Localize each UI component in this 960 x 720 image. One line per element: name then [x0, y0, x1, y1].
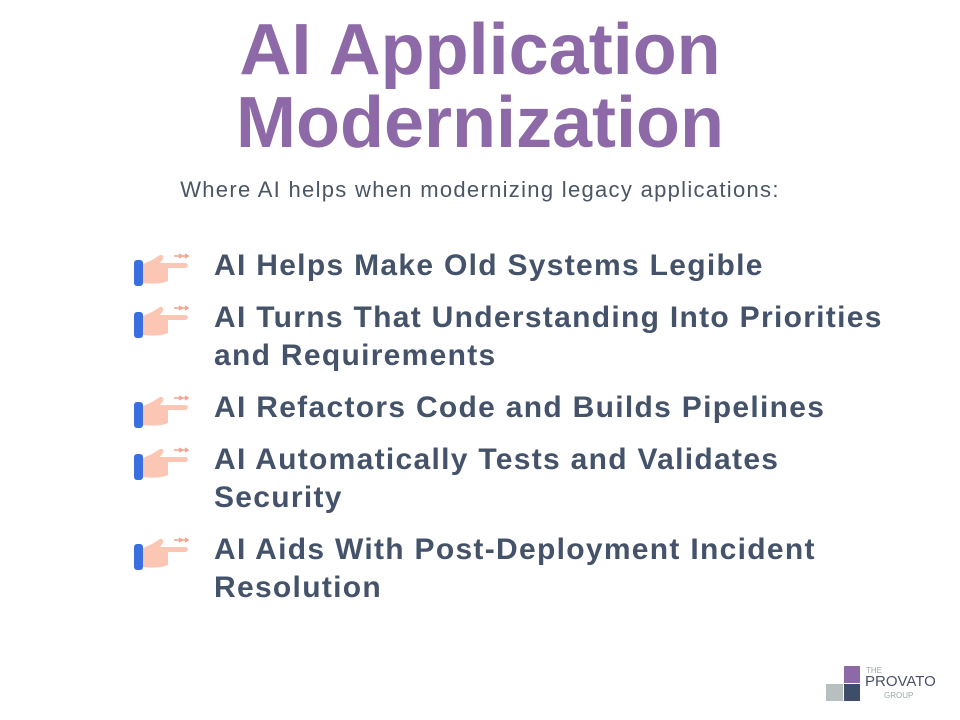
title: [236, 10, 724, 163]
icon: pointing hand: [134, 396, 190, 428]
logo: [826, 666, 936, 701]
title: AI Application: [239, 10, 721, 90]
item 2: [134, 301, 883, 372]
logo: GROUP: [884, 691, 913, 700]
text: AI Aids With Post-Deployment Incident: [214, 533, 816, 566]
text: [214, 533, 816, 604]
icon: pointing hand: [134, 254, 190, 286]
text: [214, 443, 779, 514]
text: AI Turns That Understanding Into Priorities: [214, 301, 883, 334]
logo: PROVATO: [865, 673, 936, 690]
subtitle: Where AI helps when modernizing legacy applications:: [180, 177, 780, 202]
item 5: [134, 533, 816, 604]
item 1: [134, 249, 764, 286]
icon: pointing hand: [134, 448, 190, 480]
text: Security: [214, 481, 343, 514]
title: Modernization: [236, 83, 724, 163]
item 3: [134, 391, 825, 428]
text: [214, 301, 883, 372]
text: AI Helps Make Old Systems Legible: [214, 249, 764, 282]
text: AI Refactors Code and Builds Pipelines: [214, 391, 825, 424]
text: and Requirements: [214, 339, 497, 372]
icon: pointing hand: [134, 306, 190, 338]
text: AI Automatically Tests and Validates: [214, 443, 779, 476]
text: Resolution: [214, 571, 382, 604]
item 4: [134, 443, 779, 514]
logo: THE: [866, 666, 882, 675]
icon: pointing hand: [134, 538, 190, 570]
